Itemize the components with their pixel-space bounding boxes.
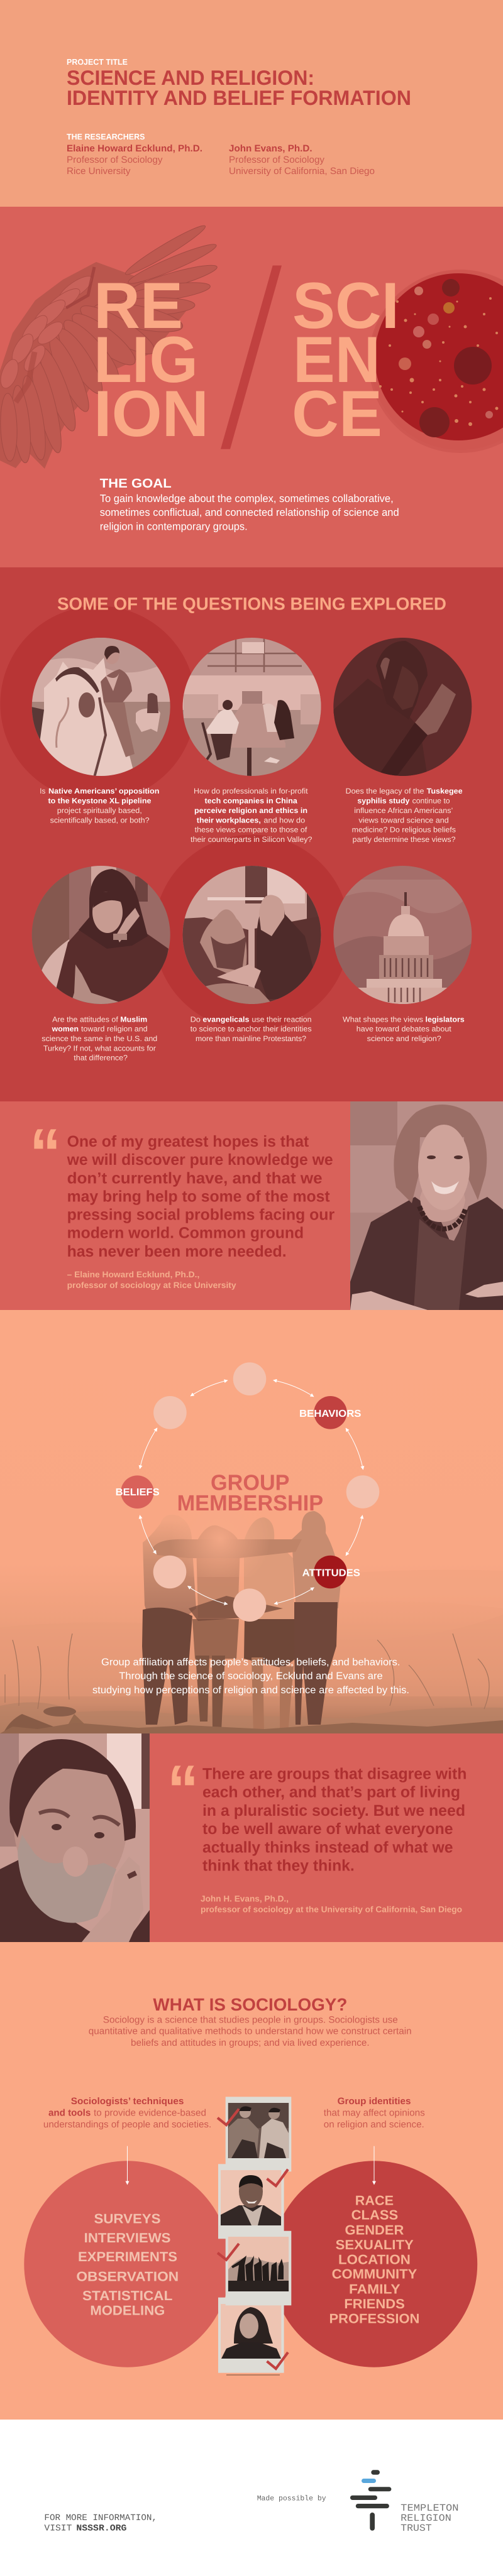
text: goal statement: religion in contemporary groups. bbox=[100, 520, 248, 533]
question text 6 bbox=[343, 1015, 465, 1043]
circle: identities: COMMUNITY bbox=[332, 2267, 417, 2282]
quote text: in a pluralistic society. But we need bbox=[202, 1802, 465, 1820]
text: group affiliation caption: Group affiliation affects people’s attitudes, beliefs, and behaviors. bbox=[101, 1657, 400, 1668]
text: more information: NSSSR.ORG bbox=[76, 2524, 126, 2534]
photo: US Capitol bbox=[333, 866, 473, 1005]
question text 3: medicine? Do religious beliefs bbox=[352, 826, 456, 834]
label: project title: PROJECT TITLE bbox=[67, 57, 128, 67]
polaroid: two men bbox=[226, 2097, 291, 2171]
text: techniques and tools bbox=[43, 2096, 211, 2130]
question text 3: Does the legacy of the bbox=[346, 787, 424, 795]
question text 1 bbox=[40, 787, 159, 824]
node: upper left bbox=[153, 1396, 187, 1429]
circle: identities: FAMILY bbox=[349, 2281, 401, 2296]
text: goal statement bbox=[100, 493, 399, 533]
question text 2: tech companies in China bbox=[205, 797, 297, 805]
text: sociology definition: Sociology is a science that studies people in groups. Sociologists use bbox=[103, 2014, 398, 2025]
polaroid: smiling man bbox=[218, 2164, 284, 2239]
quote text: modern world. Common ground bbox=[67, 1225, 304, 1242]
image: petri dish bbox=[368, 270, 503, 453]
circle: identities: GENDER bbox=[345, 2222, 404, 2237]
circle: methods: STATISTICAL bbox=[82, 2288, 172, 2303]
text: group affiliation caption: studying how perceptions of religion and science are affected by this. bbox=[92, 1685, 409, 1696]
logo: Templeton Religion Trust bbox=[350, 2470, 459, 2534]
question text 5: to science to anchor their identities bbox=[191, 1025, 312, 1034]
panel: Evans quote bbox=[0, 1733, 503, 1942]
question text 3: syphilis study bbox=[357, 797, 410, 805]
polaroid: woman with curly hair bbox=[218, 2298, 284, 2375]
heading: group membership bbox=[177, 1471, 323, 1515]
question text 2: these views compare to those of bbox=[195, 826, 307, 834]
node: attitudes: ATTITUDES bbox=[302, 1568, 360, 1579]
decorative word: RELIGION: ION bbox=[94, 378, 209, 450]
title: SCIENCE AND RELIGION: bbox=[67, 66, 314, 89]
question text 2: perceive religion and ethics in bbox=[194, 806, 307, 815]
text: group affiliation caption: Through the science of sociology, Ecklund and Evans are bbox=[119, 1671, 383, 1682]
decorative word: SCIENCE: SCI bbox=[292, 270, 399, 342]
researcher: John Evans: Professor of Sociology bbox=[229, 155, 325, 165]
photo: man praying bbox=[333, 638, 473, 777]
quote text: don’t currently have, and that we bbox=[67, 1169, 323, 1187]
question text 3: continue to bbox=[412, 797, 450, 805]
text: sociology definition: quantitative and qualitative methods to understand how we construct certain bbox=[89, 2026, 412, 2037]
question text 1: to the Keystone XL pipeline bbox=[48, 797, 152, 805]
node: behaviors: BEHAVIORS bbox=[299, 1409, 362, 1419]
text: group identities: Group identities bbox=[338, 2096, 411, 2107]
circle: methods bbox=[24, 2161, 231, 2367]
image: angel wing bbox=[0, 221, 219, 469]
quote text: we will discover pure knowledge we bbox=[67, 1151, 333, 1169]
quote text: think that they think. bbox=[202, 1857, 355, 1874]
text: more information bbox=[44, 2513, 157, 2534]
node: right bbox=[346, 1475, 379, 1509]
quote mark: “ bbox=[30, 1115, 61, 1192]
logo: Templeton Religion Trust: TRUST bbox=[401, 2523, 432, 2534]
text: group identities: that may affect opinions bbox=[324, 2108, 425, 2119]
background circle: centre bbox=[154, 834, 350, 1030]
photo: tech office bbox=[182, 638, 322, 777]
circle: methods: OBSERVATION bbox=[76, 2269, 179, 2284]
person 3 bbox=[244, 1517, 296, 1733]
question text 4: Muslim bbox=[120, 1015, 147, 1024]
heading: WHAT IS SOCIOLOGY? bbox=[153, 1995, 347, 2014]
slash divider bbox=[221, 265, 282, 449]
photo: Muslim woman reading bbox=[31, 866, 171, 1005]
text: sociology definition bbox=[89, 2014, 412, 2048]
panel: footer bbox=[0, 2420, 503, 2576]
question text 5: more than mainline Protestants? bbox=[196, 1034, 306, 1043]
decorative word: SCIENCE bbox=[292, 270, 399, 450]
text: more information: FOR MORE INFORMATION, bbox=[44, 2513, 157, 2523]
person 1 bbox=[142, 1515, 196, 1725]
question text 4: that difference? bbox=[74, 1054, 128, 1062]
title: IDENTITY AND BELIEF FORMATION bbox=[67, 86, 411, 109]
question text 6: science and religion? bbox=[367, 1034, 441, 1043]
logo: Templeton Religion Trust: TEMPLETON bbox=[401, 2502, 459, 2514]
question text 6: have toward debates about bbox=[357, 1025, 451, 1034]
circle: methods: EXPERIMENTS bbox=[78, 2249, 177, 2264]
node: beliefs: BELIEFS bbox=[116, 1487, 160, 1498]
researcher: Elaine Howard Ecklund: Rice University bbox=[67, 166, 131, 177]
quote text: has never been more needed. bbox=[67, 1243, 287, 1260]
attribution: John H. Evans, Ph.D., bbox=[201, 1894, 289, 1904]
researcher: John Evans bbox=[229, 143, 375, 177]
question text 6: What shapes the views bbox=[343, 1015, 423, 1024]
quote text: each other, and that’s part of living bbox=[202, 1784, 460, 1801]
heading: group membership: GROUP bbox=[211, 1471, 289, 1495]
researcher: Elaine Howard Ecklund: Professor of Sociology bbox=[67, 155, 163, 165]
question text 4 bbox=[41, 1015, 157, 1062]
node: behaviors bbox=[299, 1396, 362, 1429]
question text 1: Native Americans’ opposition bbox=[48, 787, 160, 795]
question text 3 bbox=[346, 787, 463, 844]
researcher: Elaine Howard Ecklund bbox=[67, 143, 202, 177]
text: techniques and tools: to provide evidence-based bbox=[94, 2108, 206, 2119]
question text 4: women bbox=[52, 1025, 79, 1034]
portrait: John H. Evans bbox=[0, 1733, 150, 1942]
check marks bbox=[218, 2109, 288, 2369]
person 4 bbox=[292, 1511, 341, 1725]
quote text bbox=[67, 1133, 334, 1260]
node: bottom bbox=[233, 1588, 266, 1622]
attribution bbox=[67, 1270, 236, 1290]
researcher: John Evans: University of California, San Diego bbox=[229, 166, 375, 177]
decorative word: SCIENCE: CE bbox=[292, 378, 382, 450]
text: techniques and tools: and tools bbox=[48, 2108, 91, 2119]
circle: methods: SURVEYS bbox=[94, 2211, 161, 2226]
quote text: pressing social problems facing our bbox=[67, 1206, 334, 1224]
decorative word: SCIENCE: EN bbox=[293, 324, 380, 396]
panel: group membership diagram bbox=[0, 1310, 503, 1734]
researcher: John Evans: John Evans, Ph.D. bbox=[229, 143, 312, 154]
circle: identities: FRIENDS bbox=[344, 2296, 405, 2311]
question text 4: toward religion and bbox=[81, 1025, 148, 1034]
question text 2: and how do bbox=[263, 816, 306, 824]
question text 4: science the same in the U.S. and bbox=[41, 1034, 157, 1043]
circle: identities: PROFESSION bbox=[329, 2311, 419, 2327]
text: techniques and tools: understandings of people and societies. bbox=[43, 2119, 211, 2130]
heading: group membership: MEMBERSHIP bbox=[177, 1491, 323, 1515]
attribution bbox=[201, 1894, 462, 1914]
question text 5: Do bbox=[191, 1015, 201, 1024]
text: group identities: on religion and science. bbox=[324, 2119, 424, 2130]
circle: identities: SEXUALITY bbox=[336, 2237, 414, 2252]
researcher: Elaine Howard Ecklund: Elaine Howard Ecklund, Ph.D. bbox=[67, 143, 202, 154]
circle: identities bbox=[271, 2161, 477, 2367]
question text 3: influence African Americans’ bbox=[354, 806, 453, 815]
quote text: may bring help to some of the most bbox=[67, 1187, 330, 1205]
text: made possible by: Made possible by bbox=[257, 2494, 326, 2502]
title bbox=[67, 66, 411, 109]
panel: what is sociology bbox=[0, 1942, 503, 2420]
text: goal statement: To gain knowledge about the complex, sometimes collaborative, bbox=[100, 493, 394, 505]
quote text: actually thinks instead of what we bbox=[202, 1838, 453, 1856]
question text 3: Tuskegee bbox=[427, 787, 463, 795]
attribution: professor of sociology at the University of California, San Diego bbox=[201, 1904, 462, 1914]
panel: religion / science hero bbox=[0, 207, 503, 567]
diagram arrows bbox=[140, 1380, 363, 1604]
portrait: Elaine Howard Ecklund bbox=[350, 1101, 503, 1310]
question text 5: evangelicals bbox=[202, 1015, 250, 1024]
question text 2: their counterparts in Silicon Valley? bbox=[191, 835, 312, 844]
text: sociology definition: beliefs and attitudes in groups; and via lived experience. bbox=[131, 2038, 370, 2048]
question text 3: views toward science and bbox=[358, 816, 449, 824]
text: group affiliation caption bbox=[92, 1657, 409, 1696]
question text 5: use their reaction bbox=[252, 1015, 312, 1024]
panel: Ecklund quote bbox=[0, 1101, 503, 1310]
question text 2 bbox=[191, 787, 312, 844]
heading: the goal: THE GOAL bbox=[100, 476, 172, 491]
photo: women praying bbox=[182, 866, 323, 1005]
decorative word: RELIGION: LIG bbox=[94, 324, 198, 396]
text: goal statement: sometimes conflictual, and connected relationship of science and bbox=[100, 506, 399, 518]
question text 2: their workplaces, bbox=[197, 816, 261, 824]
question text 4: Turkey? If not, what accounts for bbox=[43, 1044, 156, 1052]
logo: Templeton Religion Trust: RELIGION bbox=[401, 2513, 451, 2524]
circle: identities: RACE bbox=[355, 2193, 394, 2208]
question text 1: project spiritually based, bbox=[57, 806, 142, 815]
node: top bbox=[233, 1362, 266, 1395]
text: techniques and tools: Sociologists’ techniques bbox=[71, 2096, 184, 2107]
photo: rider and horse bbox=[31, 638, 171, 777]
quote text: One of my greatest hopes is that bbox=[67, 1133, 309, 1150]
node: beliefs bbox=[116, 1475, 160, 1509]
text: more information: VISIT bbox=[44, 2524, 72, 2534]
attribution: professor of sociology at Rice University bbox=[67, 1280, 236, 1290]
question text 2: How do professionals in for-profit bbox=[194, 787, 308, 795]
question text 1: Is bbox=[40, 787, 45, 795]
panel: questions being explored bbox=[0, 567, 503, 1101]
quote text: There are groups that disagree with bbox=[202, 1766, 467, 1783]
circle: identities: LOCATION bbox=[338, 2252, 411, 2267]
circle: methods: INTERVIEWS bbox=[84, 2230, 171, 2246]
node: attitudes bbox=[302, 1556, 360, 1588]
question text 3: partly determine these views? bbox=[353, 835, 456, 844]
person 2 (faded) bbox=[192, 1525, 240, 1731]
circle: methods: MODELING bbox=[90, 2303, 165, 2318]
node: lower left bbox=[153, 1556, 186, 1588]
question text 1: scientifically based, or both? bbox=[50, 816, 150, 824]
quote mark: “ bbox=[167, 1751, 199, 1828]
decorative word: RELIGION bbox=[94, 270, 209, 450]
quote text bbox=[202, 1766, 467, 1874]
attribution: – Elaine Howard Ecklund, Ph.D., bbox=[67, 1270, 199, 1279]
decorative word: RELIGION: RE bbox=[94, 270, 183, 342]
photo: friends on a hillside bbox=[0, 1508, 503, 1734]
question text 5 bbox=[191, 1015, 312, 1043]
panel: project header bbox=[0, 0, 503, 207]
question text 6: legislators bbox=[425, 1015, 465, 1024]
background circle: left bbox=[0, 606, 196, 802]
circle: identities: CLASS bbox=[351, 2208, 398, 2223]
quote text: to be well aware of what everyone bbox=[202, 1820, 453, 1838]
polaroid: silhouettes bbox=[226, 2231, 291, 2305]
text: group identities bbox=[324, 2096, 425, 2130]
arrow: right bbox=[373, 2146, 375, 2185]
label: the researchers: THE RESEARCHERS bbox=[67, 132, 145, 141]
question text 4: Are the attitudes of bbox=[52, 1015, 118, 1024]
arrow: left bbox=[127, 2146, 128, 2185]
heading: SOME OF THE QUESTIONS BEING EXPLORED bbox=[57, 594, 446, 614]
